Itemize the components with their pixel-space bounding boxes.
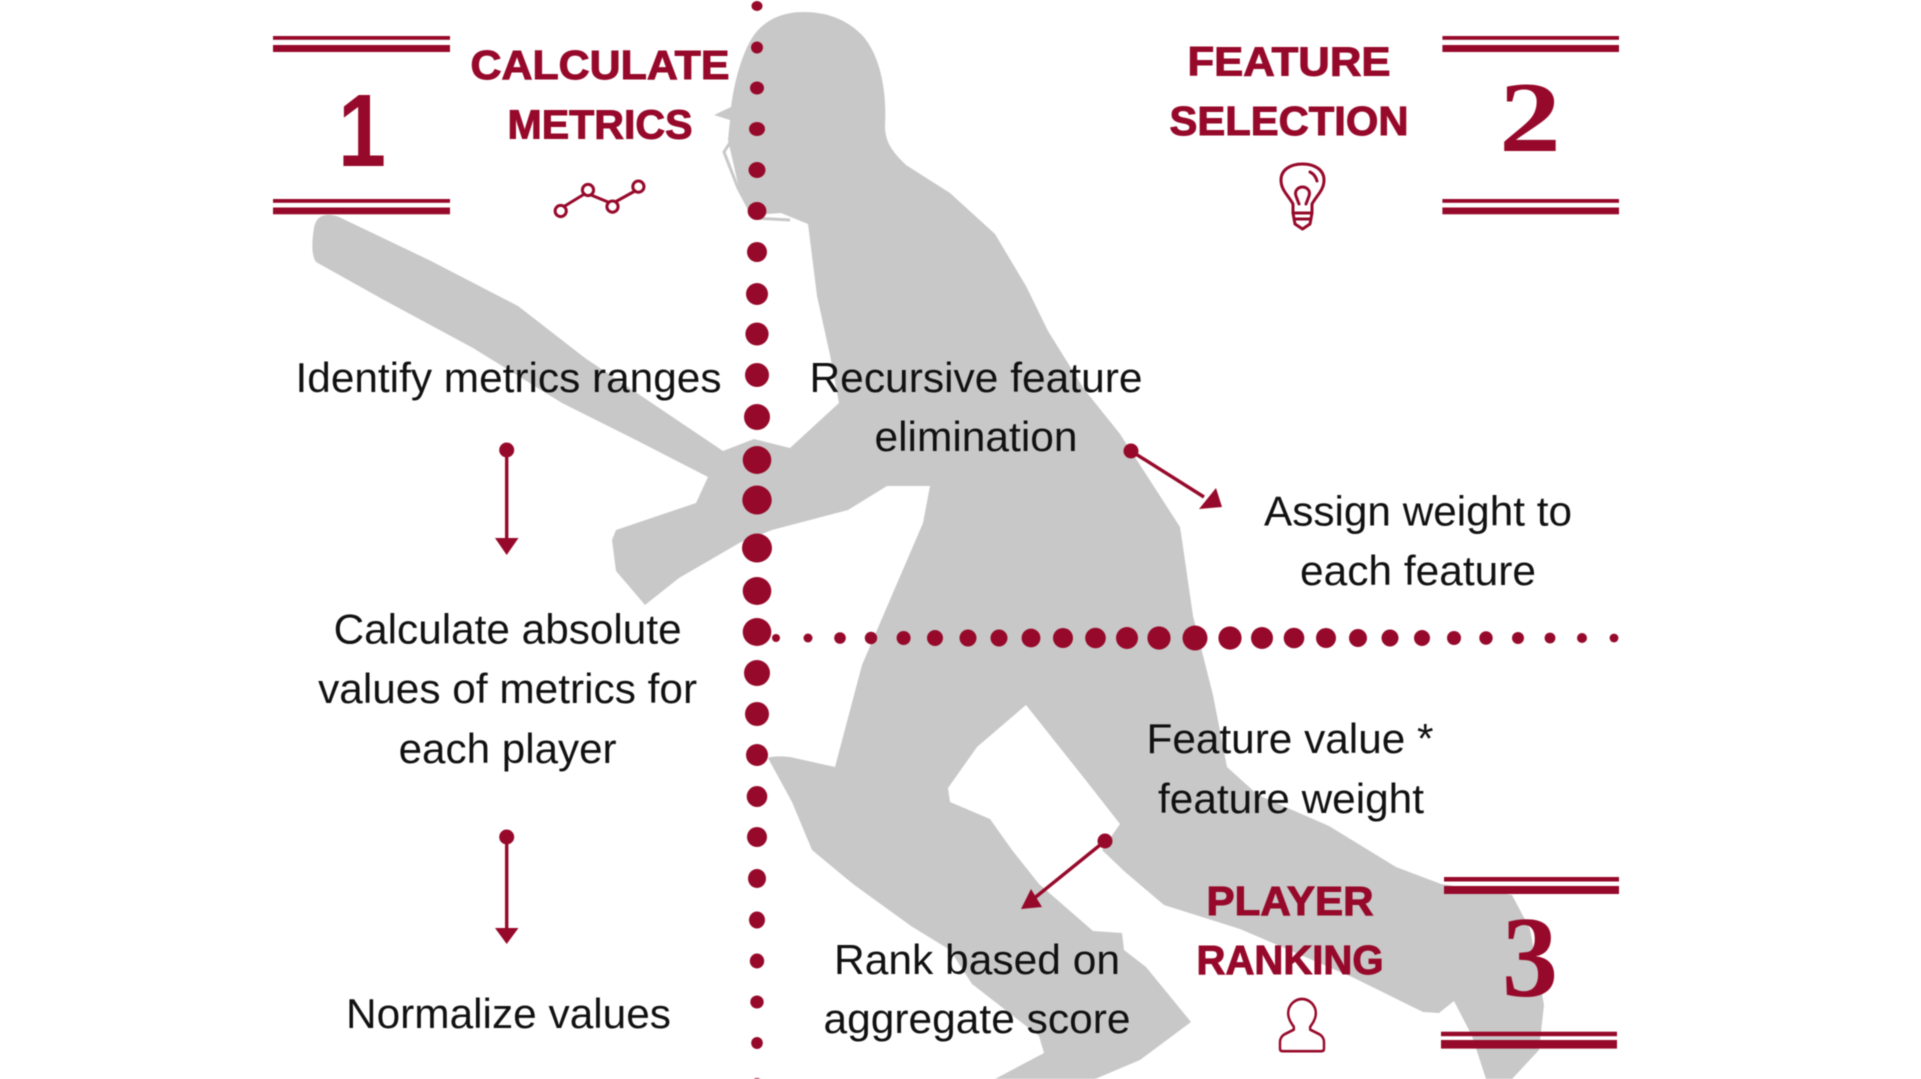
arrow: feature weight to rank — [1021, 834, 1112, 909]
text: recursive feature elimination: Recursive feature — [810, 354, 1142, 401]
text: calculate absolute values — [318, 606, 697, 772]
arrow: identify to calculate — [495, 442, 518, 555]
number 2: 2 — [1499, 61, 1561, 173]
heading: calculate metrics: METRICS — [508, 102, 692, 148]
panel: step 3 number block — [1441, 877, 1619, 1049]
horizontal dotted divider — [772, 626, 1618, 650]
text: calculate absolute values: each player — [399, 725, 617, 772]
heading: feature selection: FEATURE — [1188, 38, 1390, 84]
text: recursive feature elimination: elimination — [874, 413, 1078, 460]
heading: feature selection — [1170, 38, 1408, 144]
heading: player ranking: PLAYER — [1206, 878, 1374, 924]
text: calculate absolute values: Calculate absolute — [334, 606, 682, 652]
icon: person — [1280, 999, 1324, 1051]
text: assign weight to each feature: each feature — [1300, 547, 1536, 594]
text: feature value times weight: Feature value * — [1146, 715, 1434, 762]
heading: feature selection: SELECTION — [1170, 98, 1408, 144]
panel: step 2 number block — [1442, 36, 1619, 214]
text: recursive feature elimination — [810, 354, 1142, 460]
icon: line chart — [555, 181, 644, 217]
heading: player ranking: RANKING — [1196, 937, 1384, 983]
heading: calculate metrics — [470, 42, 730, 148]
text: calculate absolute values: values of metrics for — [318, 665, 697, 712]
panel: step 1 number block — [273, 36, 450, 214]
heading: calculate metrics: CALCULATE — [470, 42, 730, 88]
text: feature value times weight — [1146, 715, 1434, 822]
number 3: 3 — [1502, 894, 1558, 1022]
batsman silhouette — [312, 12, 1544, 1079]
arrow: calculate to normalize — [495, 830, 518, 944]
vertical dotted divider — [742, 1, 772, 1079]
text: normalize values: Normalize values — [346, 990, 671, 1037]
text: rank based on aggregate score: aggregate score — [824, 995, 1130, 1042]
text: assign weight to each feature: Assign weight to — [1264, 488, 1572, 534]
text: feature value times weight: feature weight — [1158, 775, 1424, 822]
text: rank based on aggregate score: Rank based on — [834, 936, 1120, 983]
heading: player ranking — [1196, 878, 1384, 983]
text: assign weight to each feature — [1264, 488, 1572, 594]
number 1: 1 — [338, 73, 386, 188]
text: identify metrics ranges: Identify metrics ranges — [296, 354, 722, 401]
arrow: elimination to assign weight — [1124, 444, 1222, 509]
text: rank based on aggregate score — [824, 936, 1130, 1042]
icon: light bulb — [1281, 164, 1324, 229]
